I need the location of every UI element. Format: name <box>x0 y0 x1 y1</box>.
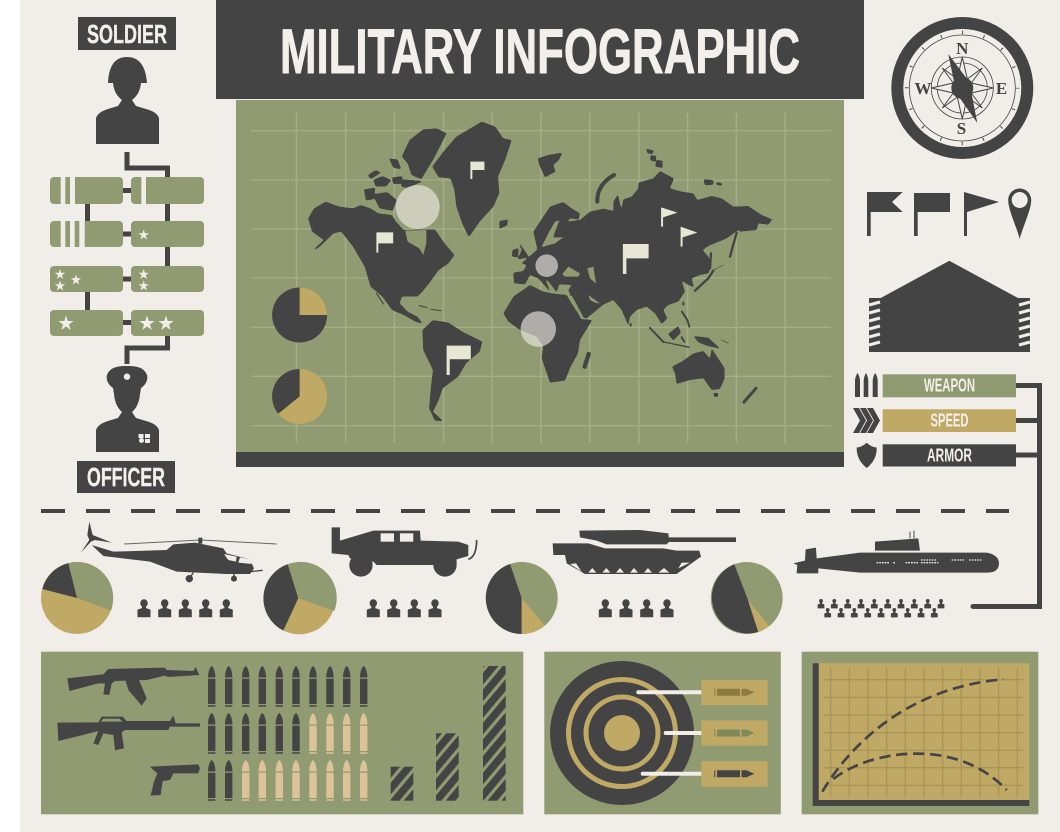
pie chart: humvee <box>263 562 337 634</box>
officer label: OFFICER <box>87 462 165 492</box>
soldier label: SOLDIER <box>87 19 167 49</box>
continents: americas and greenland <box>308 122 512 421</box>
speed bar: SPEED <box>930 410 968 430</box>
icon: shield <box>857 443 877 468</box>
soldier label <box>78 17 176 50</box>
map pie bottom <box>272 369 327 424</box>
title banner <box>216 0 864 99</box>
speed bar <box>883 409 1016 432</box>
icon: chevrons <box>853 408 880 433</box>
people: humvee crew <box>367 599 442 617</box>
icon: soldier <box>96 57 159 144</box>
armor bar: ARMOR <box>927 446 972 466</box>
icon: compass: W <box>914 79 932 98</box>
people: tank crew <box>599 599 674 617</box>
people: helicopter crew <box>137 599 233 617</box>
panel: world map <box>236 100 844 467</box>
rank bars <box>50 177 204 336</box>
caribbean islands <box>376 293 441 311</box>
panel: trajectory chart <box>802 652 1038 814</box>
striped bar chart <box>391 666 506 801</box>
bullet trace lines <box>638 692 702 774</box>
icon: compass: E <box>996 79 1007 98</box>
continents: eurasia africa australia <box>499 149 772 397</box>
icon: tank <box>553 530 736 574</box>
trajectory curves <box>822 679 1007 792</box>
pie chart: submarine <box>711 562 783 634</box>
icon: helicopter <box>81 522 277 582</box>
panel: target <box>544 652 781 814</box>
panel: weapons and ammunition <box>41 652 523 814</box>
title banner: MILITARY INFOGRAPHIC <box>280 17 800 87</box>
weapon bar <box>883 374 1016 397</box>
target rings <box>550 661 694 805</box>
icons: guns <box>57 667 200 796</box>
icon: bullets <box>855 373 878 397</box>
legend: weapon speed armor <box>853 373 1040 606</box>
people: submarine crew <box>818 599 944 617</box>
hudson bay <box>405 230 426 255</box>
ammo cards <box>701 680 768 787</box>
icons: flags and map pin <box>867 189 1031 239</box>
pie chart: tank <box>486 562 558 634</box>
armor bar <box>883 444 1016 466</box>
rank stripes <box>61 177 146 247</box>
small islands <box>597 175 614 202</box>
legend connector <box>973 386 1040 606</box>
bullet rows <box>208 666 367 801</box>
panel: soldier to officer rank ladder <box>50 17 204 493</box>
officer label <box>77 461 175 493</box>
chart axes <box>813 663 1029 806</box>
icon: submarine <box>793 531 999 573</box>
icon: hangar <box>869 261 1030 352</box>
pie chart: helicopter <box>41 562 113 634</box>
dashed divider <box>41 509 1009 513</box>
highlight circles <box>396 185 558 347</box>
icon: compass <box>891 17 1033 159</box>
icon: compass: S <box>957 119 966 138</box>
map pie top <box>272 288 327 342</box>
icon: humvee <box>332 527 477 577</box>
rank stars <box>55 230 174 330</box>
rank connectors <box>88 152 168 364</box>
inland seas <box>542 221 600 319</box>
icon: officer <box>96 366 159 452</box>
weapon bar: WEAPON <box>924 376 975 396</box>
map flags <box>376 162 697 375</box>
icon: compass: N <box>956 39 969 58</box>
